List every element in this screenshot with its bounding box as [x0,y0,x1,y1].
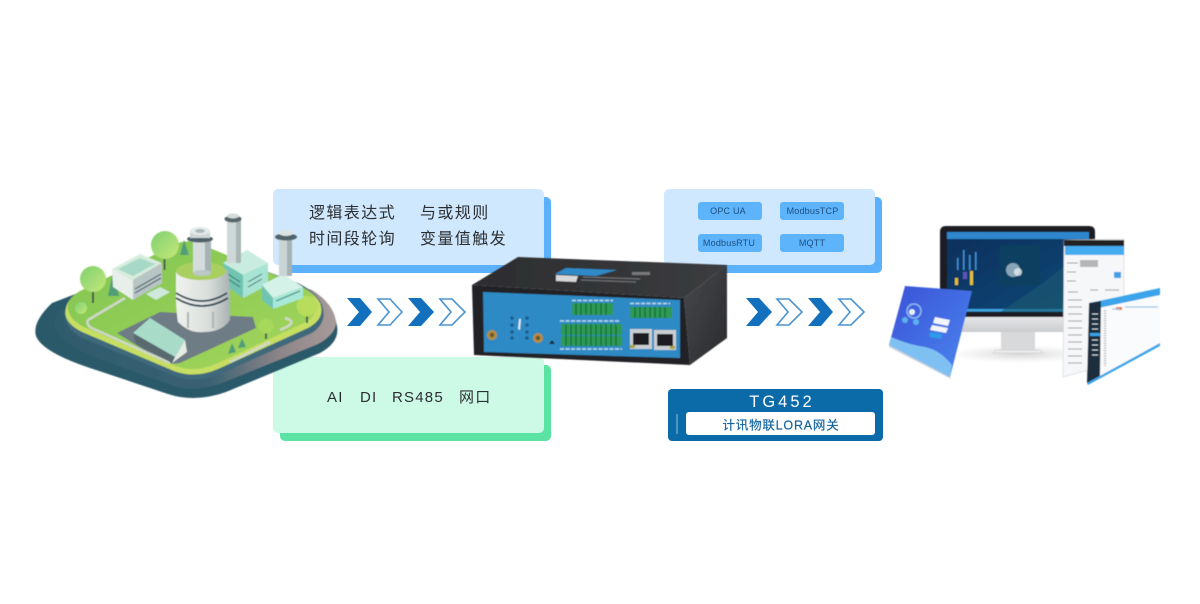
protocol pills: OPC UA [710,206,746,216]
building: front hall [133,318,187,363]
panel: product name [668,389,883,441]
panel: data inputs [273,357,551,441]
text: input types: AI [327,389,344,406]
reactor tower [176,227,230,332]
trees [75,231,318,354]
text: logic rule labels [309,204,507,248]
ethernet ports [630,329,676,350]
text: product title: 计讯物联LORA网关 [722,418,840,432]
monitor [940,226,1095,353]
illustration: software screens [889,226,1160,385]
building: left block [112,254,170,300]
text: input types [327,389,491,406]
antenna connectors [487,330,555,344]
protocol pills: MQTT [799,238,825,248]
text: model number: TG452 [749,393,815,411]
illustration: industrial island [35,214,337,398]
text: input types: RS485 [392,389,444,406]
text: input types: 网口 [459,389,491,406]
text: input types: DI [360,389,377,406]
text: logic rule labels: 逻辑表达式 [309,204,396,222]
device front panel [483,292,680,358]
table window [1087,288,1160,385]
text: logic rule labels: 变量值触发 [420,230,507,248]
panel: logic rules [273,189,551,273]
chimney: back [224,214,242,263]
arrows: left chevrons [347,298,465,326]
protocol pills: ModbusTCP [787,206,838,216]
text: logic rule labels: 时间段轮询 [309,230,396,248]
protocol pills: ModbusRTU [703,238,755,248]
status LEDs [510,316,529,340]
device: TG452 gateway [472,257,727,365]
text: logic rule labels: 与或规则 [420,204,490,222]
building: teal blocks [223,250,303,309]
phone screen [1063,239,1124,377]
terminal blocks [560,300,672,349]
protocol pills [698,202,844,252]
tablet login screen [889,286,972,379]
device top label [555,268,650,282]
panel: protocols [664,189,882,273]
chimney: right [275,230,297,276]
road [117,312,256,364]
arrows: right chevrons [746,298,864,326]
